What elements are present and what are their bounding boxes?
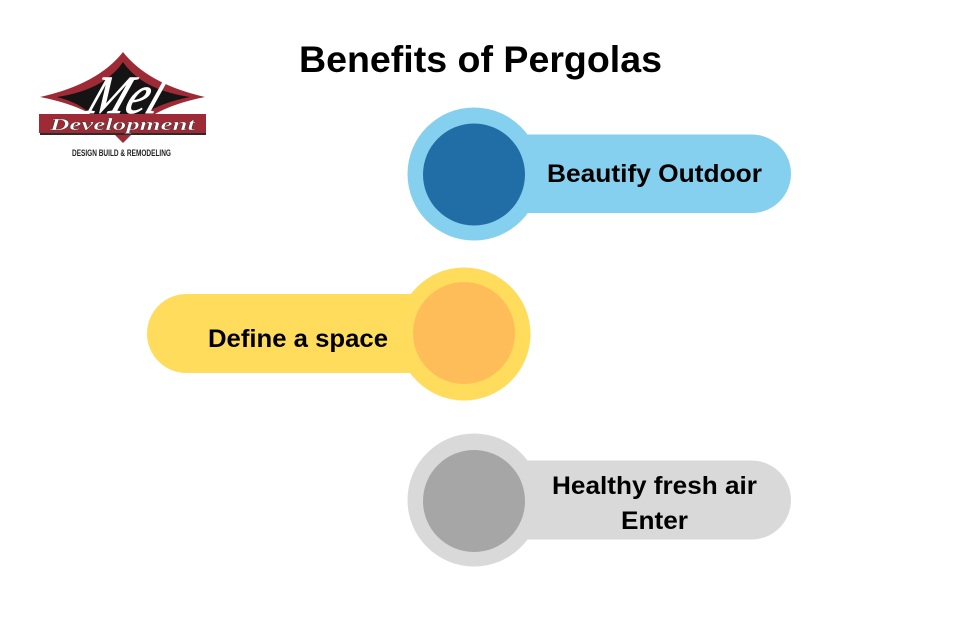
panel: Define a space: Define a space (208, 325, 388, 353)
logo: Mel Development: DESIGN BUILD & REMODELING (72, 148, 171, 158)
panel: Healthy fresh air Enter: Enter (621, 507, 688, 535)
logo: Mel Development: Development (48, 115, 197, 134)
logo: Mel Development (39, 52, 206, 158)
panel: Healthy fresh air Enter: Healthy fresh air (552, 472, 757, 500)
panel: Healthy fresh air Enter (408, 434, 791, 566)
panel: Beautify Outdoor (408, 108, 791, 240)
panel: Beautify Outdoor: Beautify Outdoor (547, 160, 762, 188)
panel: Define a space (147, 268, 530, 400)
title: Benefits of Pergolas (299, 39, 662, 80)
logo: Mel Development: Mel (78, 66, 175, 125)
